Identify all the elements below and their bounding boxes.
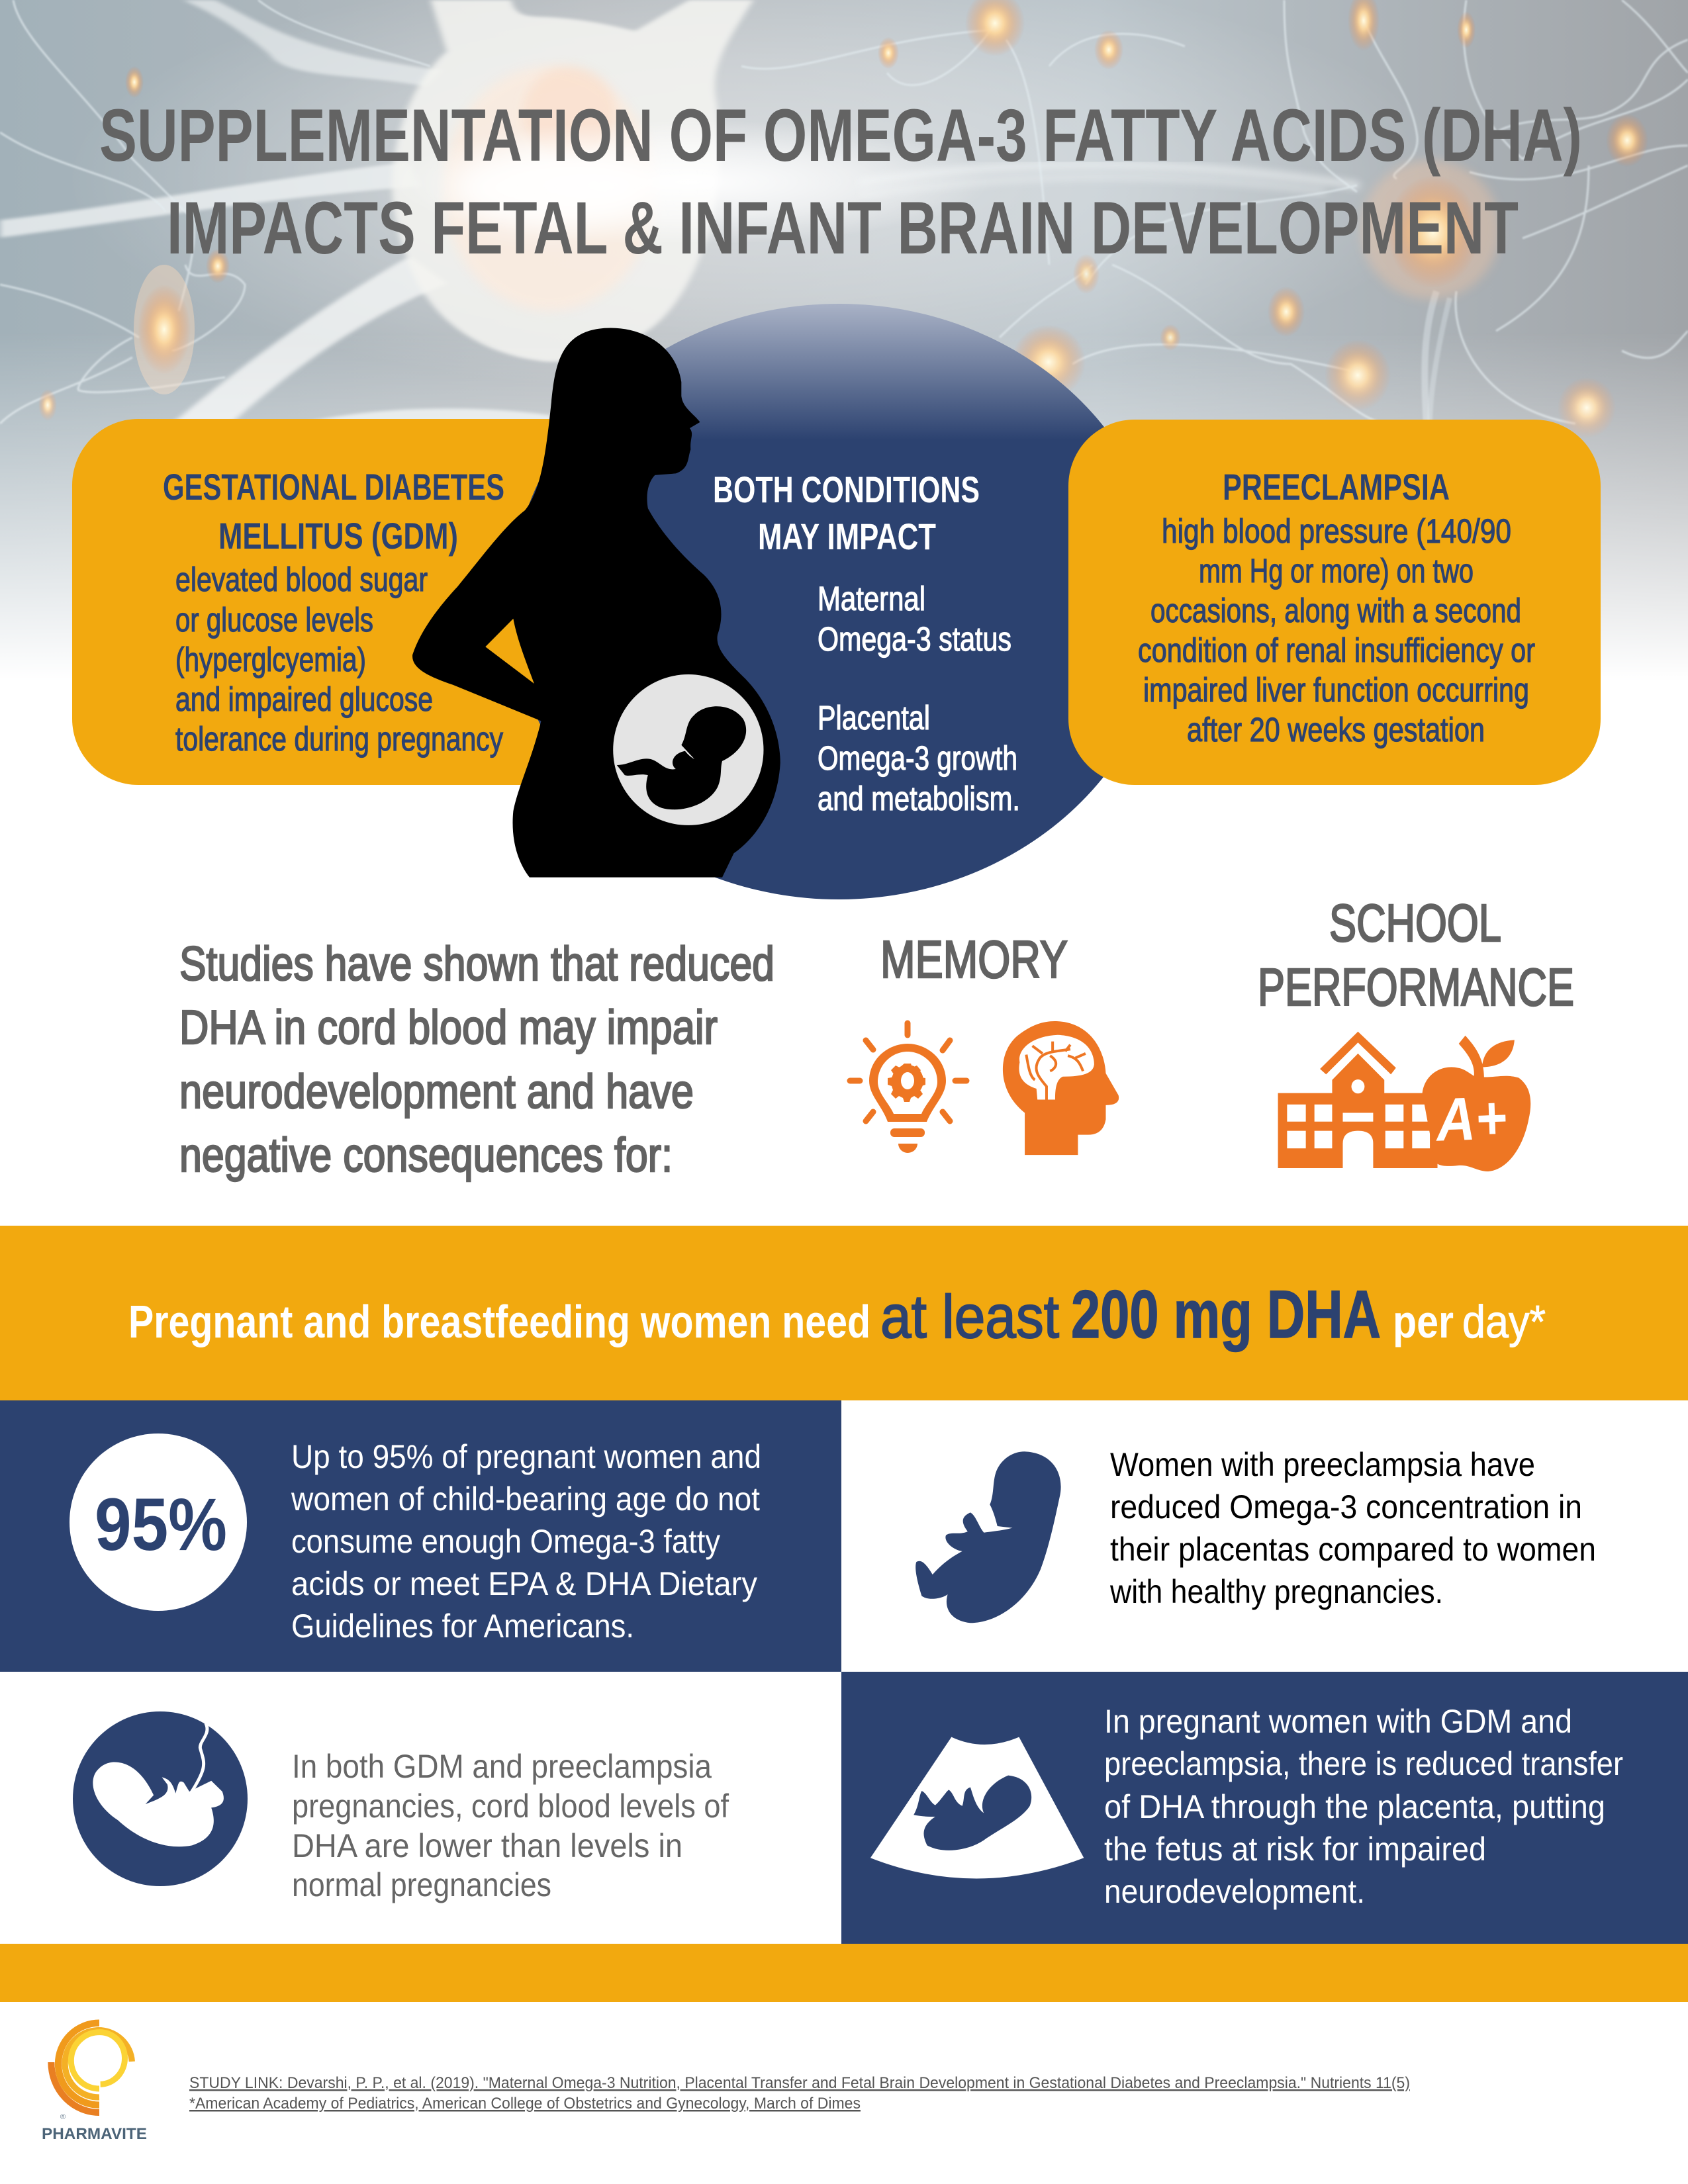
text: GDM description: tolerance during pregnancy bbox=[175, 720, 503, 758]
text: placenta fact bbox=[1109, 1446, 1596, 1610]
icon: apple with A+: A+ bbox=[1434, 1084, 1508, 1154]
text: impact list: and metabolism. bbox=[818, 780, 1020, 817]
heading: school performance bbox=[1258, 893, 1574, 1017]
logo: Pharmavite: PHARMAVITE bbox=[42, 2125, 147, 2143]
text: placental transfer fact: neurodevelopment. bbox=[1104, 1873, 1365, 1910]
panel: 95 percent statistic bbox=[0, 1400, 841, 1672]
text: impact list: Omega-3 growth bbox=[818, 739, 1017, 777]
heading: memory: MEMORY bbox=[880, 930, 1068, 989]
banner: daily DHA need: at least bbox=[880, 1283, 1059, 1351]
text: cord blood fact: normal pregnancies bbox=[292, 1866, 551, 1903]
icon: fetus in circle bbox=[73, 1711, 248, 1886]
text: placenta fact: Women with preeclampsia have bbox=[1110, 1446, 1535, 1483]
text: preeclampsia description bbox=[1138, 512, 1535, 749]
banner: daily DHA need: 200 mg DHA bbox=[1071, 1277, 1381, 1352]
text: studies statement bbox=[179, 938, 774, 1182]
icon: pregnant woman silhouette bbox=[412, 328, 780, 878]
text: preeclampsia description: occasions, along with a second bbox=[1150, 592, 1521, 629]
text: 95 percent description bbox=[291, 1438, 761, 1645]
heading: school performance: SCHOOL bbox=[1329, 893, 1501, 952]
text: impact list: Omega-3 status bbox=[818, 620, 1011, 658]
text: impact list bbox=[818, 580, 1020, 817]
text: preeclampsia description: after 20 weeks gestation bbox=[1187, 711, 1485, 749]
heading: both conditions: MAY IMPACT bbox=[758, 516, 936, 557]
icon: belly circle with fetus bbox=[613, 674, 763, 825]
banner: daily DHA need: Pregnant and breastfeeding women need bbox=[128, 1296, 870, 1347]
logo: Pharmavite: ® bbox=[60, 2113, 66, 2121]
icon: school building bbox=[1278, 1032, 1438, 1168]
icon: 95% circle: 95% bbox=[95, 1483, 227, 1566]
text: cord blood fact bbox=[292, 1748, 729, 1903]
banner: daily DHA need: per bbox=[1393, 1296, 1454, 1347]
panel: cord blood fact bbox=[0, 1672, 841, 1944]
text: studies statement: negative consequences for: bbox=[179, 1129, 673, 1182]
text: studies statement: neurodevelopment and have bbox=[179, 1066, 694, 1118]
text: 95 percent description: Guidelines for Americans. bbox=[291, 1608, 634, 1645]
text: 95 percent description: consume enough Omega-3 fatty bbox=[291, 1523, 720, 1560]
text: placenta fact: their placentas compared to women bbox=[1110, 1531, 1596, 1568]
text: cord blood fact: pregnancies, cord blood levels of bbox=[292, 1788, 729, 1825]
panel: placental transfer fact bbox=[841, 1672, 1688, 1944]
text: preeclampsia description: high blood pressure (140/90 bbox=[1162, 512, 1511, 550]
text: cord blood fact: DHA are lower than levels in bbox=[292, 1827, 682, 1864]
banner: daily DHA need: day* bbox=[1462, 1296, 1546, 1347]
panel: preeclampsia bbox=[1068, 420, 1601, 785]
text: GDM description: (hyperglcyemia) bbox=[175, 641, 366, 678]
heading: GDM bbox=[163, 466, 504, 557]
logo: Pharmavite bbox=[42, 2023, 147, 2143]
heading: both conditions: BOTH CONDITIONS bbox=[713, 469, 980, 510]
text: placental transfer fact: preeclampsia, there is reduced transfer bbox=[1104, 1745, 1623, 1782]
text: GDM description: and impaired glucose bbox=[175, 680, 433, 718]
text: placenta fact: with healthy pregnancies. bbox=[1109, 1573, 1443, 1610]
text: GDM description bbox=[175, 561, 503, 758]
icon: ultrasound bbox=[870, 1737, 1084, 1878]
heading: both conditions bbox=[713, 469, 980, 557]
text: 95 percent description: Up to 95% of pregnant women and bbox=[291, 1438, 761, 1475]
text: GDM description: or glucose levels bbox=[175, 601, 373, 639]
text: 95 percent description: women of child-bearing age do not bbox=[291, 1480, 760, 1518]
text: placental transfer fact: of DHA through the placenta, putting bbox=[1104, 1788, 1605, 1825]
heading: GDM: MELLITUS (GDM) bbox=[218, 515, 458, 557]
panel: both conditions circle bbox=[511, 304, 1166, 899]
title bbox=[99, 94, 1582, 269]
neuron photo background bbox=[0, 0, 1688, 690]
heading: school performance: PERFORMANCE bbox=[1258, 958, 1574, 1017]
footnotes: study link and sources: STUDY LINK: Devarshi, P. P., et al. (2019). "Maternal Omega-3 Nutrition, Placental Transfer and Fetal Brain Development in Gestational Diabetes and Preeclampsia." Nutrients 11(5) bbox=[189, 2074, 1410, 2092]
heading: preeclampsia: PREECLAMPSIA bbox=[1223, 466, 1450, 508]
text: preeclampsia description: condition of renal insufficiency or bbox=[1138, 631, 1535, 669]
text: preeclampsia description: mm Hg or more) on two bbox=[1199, 552, 1474, 590]
text: placental transfer fact: In pregnant women with GDM and bbox=[1104, 1703, 1572, 1740]
text: placenta fact: reduced Omega-3 concentration in bbox=[1110, 1488, 1582, 1525]
footnotes: study link and sources bbox=[189, 2074, 1410, 2113]
text: studies statement: DHA in cord blood may impair bbox=[179, 1001, 718, 1054]
panel: gestational diabetes bbox=[72, 419, 596, 785]
panel: preeclampsia placenta fact bbox=[841, 1400, 1688, 1672]
icon: head with brain bbox=[1003, 1021, 1119, 1155]
icon: 95% circle bbox=[70, 1433, 247, 1611]
text: placental transfer fact: the fetus at risk for impaired bbox=[1104, 1831, 1486, 1868]
icon: apple with A+ bbox=[1423, 1036, 1530, 1171]
text: cord blood fact: In both GDM and preeclampsia bbox=[292, 1748, 712, 1785]
text: impact list: Maternal bbox=[818, 580, 925, 617]
banner: daily DHA need bbox=[0, 1226, 1688, 1400]
text: placental transfer fact bbox=[1104, 1703, 1623, 1910]
text: impact list: Placental bbox=[818, 699, 930, 737]
heading: GDM: GESTATIONAL DIABETES bbox=[163, 466, 504, 508]
icon: fetus bbox=[915, 1451, 1061, 1623]
text: preeclampsia description: impaired liver function occurring bbox=[1143, 671, 1529, 709]
text: studies statement: Studies have shown that reduced bbox=[179, 938, 774, 991]
footnotes: study link and sources: *American Academy of Pediatrics, American College of Obstetrics and Gynecology, March of Dimes bbox=[189, 2095, 861, 2113]
gold strip bbox=[0, 1944, 1688, 2002]
icon: light bulb with gear bbox=[850, 1023, 966, 1153]
text: GDM description: elevated blood sugar bbox=[175, 561, 428, 598]
text: 95 percent description: acids or meet EPA & DHA Dietary bbox=[291, 1565, 757, 1602]
